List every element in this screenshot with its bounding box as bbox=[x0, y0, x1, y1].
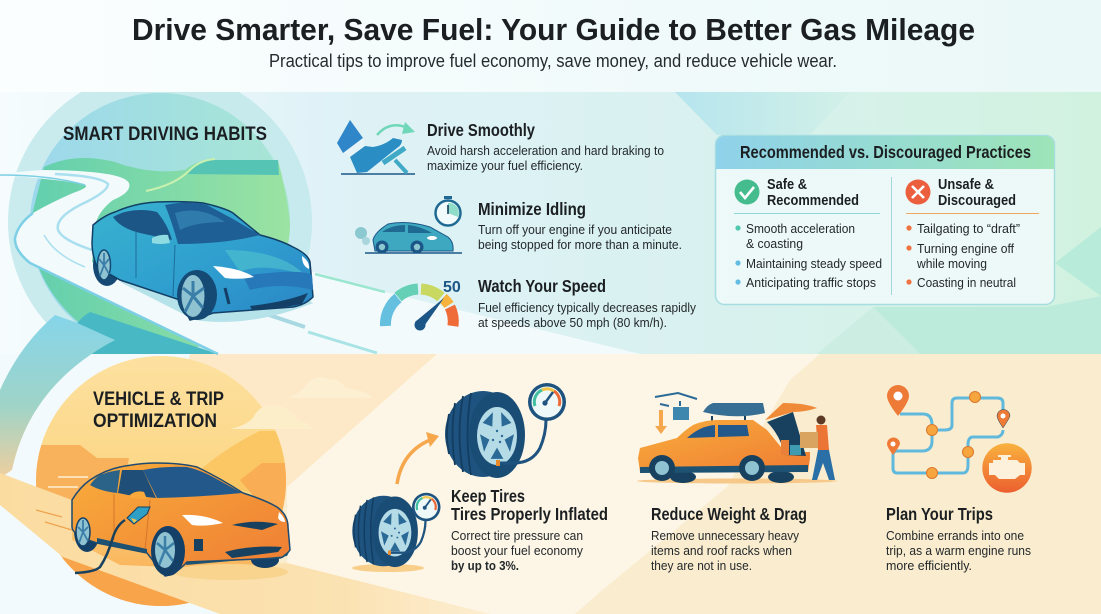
icon: foot on pedal bbox=[337, 120, 415, 174]
subtitle: Practical tips to improve fuel economy, save money, and reduce vehicle wear. bbox=[269, 51, 837, 71]
panel: smart driving habits illustration bbox=[0, 92, 637, 356]
column heading: Unsafe & bbox=[938, 176, 994, 193]
panel heading: Recommended vs. Discouraged Practices bbox=[740, 142, 1031, 162]
list: while moving bbox=[916, 256, 987, 271]
description bbox=[478, 222, 682, 252]
list bbox=[735, 221, 882, 290]
description: Turn off your engine if you anticipate bbox=[478, 222, 672, 237]
description: Correct tire pressure can bbox=[451, 528, 583, 543]
description: being stopped for more than a minute. bbox=[478, 237, 682, 252]
panel: recommended vs discouraged practices bbox=[716, 136, 1054, 304]
column heading: Recommended bbox=[767, 192, 859, 209]
icon: speedometer bbox=[385, 279, 461, 330]
heading bbox=[451, 486, 608, 524]
charging plug and cable bbox=[75, 520, 125, 573]
list: Tailgating to “draft” bbox=[917, 221, 1020, 236]
orange car bbox=[72, 463, 290, 576]
icon: tire with gauge, large bbox=[445, 383, 566, 478]
list: & coasting bbox=[746, 236, 803, 251]
description: trip, as a warm engine runs bbox=[886, 543, 1031, 558]
heading: Reduce Weight & Drag bbox=[651, 504, 807, 524]
icon: idling car with stopwatch bbox=[355, 196, 462, 254]
description: Remove unnecessary heavy bbox=[651, 528, 799, 543]
column: unsafe and discouraged bbox=[906, 176, 1039, 290]
tip: watch your speed bbox=[385, 276, 696, 330]
description: Fuel efficiency typically decreases rapidly bbox=[478, 300, 696, 315]
list: Anticipating traffic stops bbox=[746, 275, 876, 290]
tip: minimize idling bbox=[355, 196, 682, 254]
heading: Keep Tires bbox=[451, 486, 525, 506]
heading: Minimize Idling bbox=[478, 199, 586, 219]
roof box bbox=[703, 403, 765, 416]
heading: vehicle and trip optimization: VEHICLE & TRIP bbox=[93, 389, 224, 410]
title: Drive Smarter, Save Fuel: Your Guide to Better Gas Mileage bbox=[132, 12, 975, 47]
list: Turning engine off bbox=[917, 241, 1014, 256]
heading: Plan Your Trips bbox=[886, 504, 993, 524]
list bbox=[906, 221, 1020, 290]
list: Coasting in neutral bbox=[917, 275, 1016, 290]
icon: check bbox=[734, 180, 760, 204]
heading: Watch Your Speed bbox=[478, 276, 606, 296]
list: Smooth acceleration bbox=[746, 221, 855, 236]
description: more efficiently. bbox=[886, 558, 972, 573]
column heading: Discouraged bbox=[938, 192, 1016, 209]
column heading bbox=[938, 176, 1016, 209]
description bbox=[451, 528, 583, 573]
cream road bbox=[0, 473, 490, 614]
icon: cross bbox=[906, 180, 930, 204]
description bbox=[886, 528, 1031, 573]
description: boost your fuel economy bbox=[451, 543, 583, 558]
tip: keep tires inflated bbox=[352, 383, 608, 573]
tip: plan your trips bbox=[886, 385, 1032, 573]
description: Combine errands into one bbox=[886, 528, 1024, 543]
description: by up to 3%. bbox=[451, 558, 519, 573]
icon: speedometer: 50 bbox=[443, 279, 461, 296]
clouds bbox=[230, 377, 373, 429]
description bbox=[651, 528, 799, 573]
front wheel bbox=[151, 526, 185, 576]
heading: smart driving habits: SMART DRIVING HABITS bbox=[63, 124, 267, 145]
heading: Drive Smoothly bbox=[427, 120, 535, 140]
arrow: growth bbox=[397, 432, 439, 484]
rear wheel bbox=[76, 518, 90, 546]
road bbox=[0, 170, 640, 354]
icon: car with roof box and person bbox=[637, 393, 837, 484]
heading: vehicle and trip optimization bbox=[93, 389, 224, 432]
list: Maintaining steady speed bbox=[746, 256, 882, 271]
description: at speeds above 50 mph (80 km/h). bbox=[478, 315, 667, 330]
description: items and roof racks when bbox=[651, 543, 792, 558]
description bbox=[478, 300, 696, 330]
column heading bbox=[767, 176, 859, 209]
description: they are not in use. bbox=[651, 558, 752, 573]
car body bbox=[670, 471, 696, 483]
description bbox=[427, 143, 664, 173]
column: safe and recommended bbox=[734, 176, 882, 290]
heading: vehicle and trip optimization: OPTIMIZATION bbox=[93, 411, 217, 432]
tip: drive smoothly bbox=[337, 120, 664, 174]
description: maximize your fuel efficiency. bbox=[427, 158, 583, 173]
icon: route map with engine badge bbox=[887, 385, 1032, 493]
panel: vehicle and trip illustration bbox=[0, 315, 490, 614]
heading: Tires Properly Inflated bbox=[451, 504, 608, 524]
description: Avoid harsh acceleration and hard braking to bbox=[427, 143, 664, 158]
icon: tire with gauge, small bbox=[352, 493, 440, 572]
column heading: Safe & bbox=[767, 176, 807, 193]
blue car bbox=[92, 202, 313, 320]
tip: reduce weight and drag bbox=[637, 393, 837, 573]
person bbox=[816, 416, 826, 424]
